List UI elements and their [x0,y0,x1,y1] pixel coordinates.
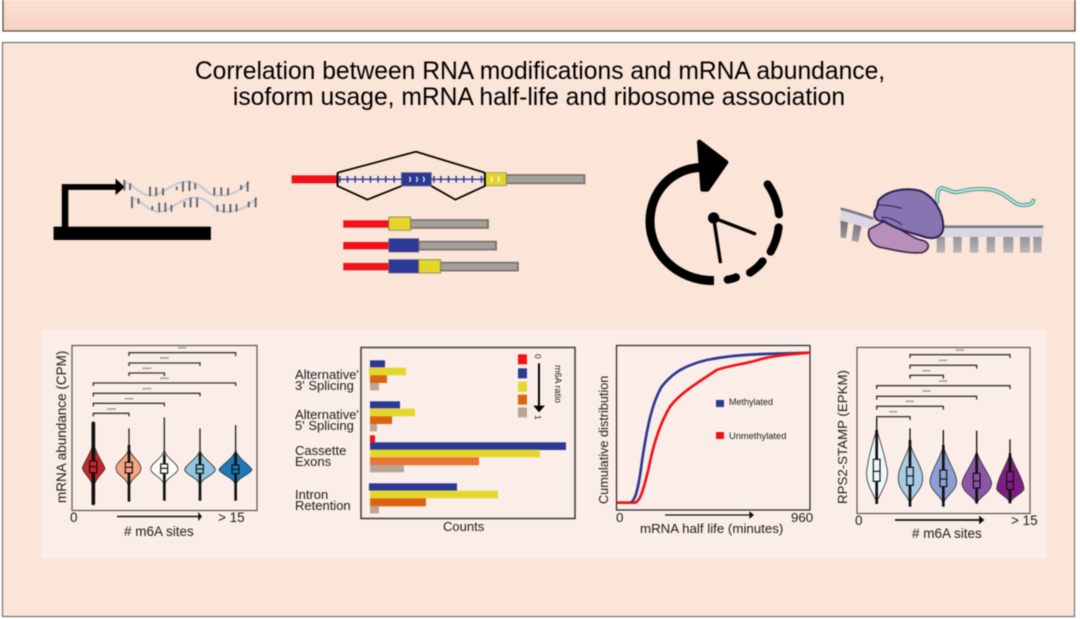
legend: Methylated [729,397,773,407]
panel: top banner [3,0,1075,31]
x axis labels [616,510,813,536]
y axis label: mRNA abundance (CPM) [54,351,69,503]
legend: m6A ratio: m6A ratio [553,365,563,403]
chart: violin RPS2-STAMP [835,348,1038,541]
arrow [117,514,201,519]
title: Correlation between RNA modifications and mRNA abundance, [195,58,885,85]
legend: Unmethylated [729,431,786,441]
panel: charts background [41,330,1047,558]
x axis labels: 960 [791,510,813,525]
category labels: Intron [295,487,328,502]
chart: violin mRNA abundance [54,346,257,539]
legend: m6A ratio: 1 [533,415,543,420]
icon: transcription promoter with RNA [54,179,257,240]
title: isoform usage, mRNA half-life and ribosome association [233,84,845,111]
arrow [895,518,983,522]
significance brackets [93,348,236,416]
category labels: Retention [295,498,351,513]
category labels: 3' Splicing [295,378,354,393]
category labels: Cassette [295,443,346,458]
violins [82,417,252,503]
axis frame [857,348,1030,514]
chart: cumulative distribution half-life [597,346,813,536]
violins [867,418,1024,507]
bars [369,360,566,513]
x axis labels: 0 [855,513,863,528]
axis frame [72,346,257,510]
arrow [665,512,753,518]
x axis label: Counts [443,519,485,534]
title [195,58,885,111]
x axis labels: 0 [70,510,78,525]
x axis labels: > 15 [1011,513,1038,528]
x axis labels: > 15 [218,510,245,525]
x axis labels [70,510,245,539]
significance brackets [877,350,1010,420]
category labels: 5' Splicing [295,418,354,433]
y axis label: RPS2-STAMP (EPKM) [835,370,850,504]
category labels: Alternative' [295,367,359,382]
y axis label: Cumulative distribution [597,376,611,504]
axis frame [616,346,810,510]
axis frame [361,348,575,518]
x axis labels: # m6A sites [912,526,982,541]
x axis labels: 0 [616,510,623,525]
x axis labels: mRNA half life (minutes) [640,521,783,536]
icon: half-life clock [650,142,779,281]
category labels: Alternative' [295,407,359,422]
category labels: Exons [295,454,332,469]
legend: m6A ratio: 0 [533,354,543,359]
curves [617,353,810,503]
icon: ribosome on mRNA [841,188,1043,253]
x axis labels: # m6A sites [124,524,194,539]
icon: alternative splicing isoforms [292,152,584,273]
category labels [295,367,359,513]
chart: isoform usage bars [295,348,575,534]
legend [716,397,786,441]
legend: m6A ratio [518,354,563,420]
x axis labels [855,513,1038,541]
